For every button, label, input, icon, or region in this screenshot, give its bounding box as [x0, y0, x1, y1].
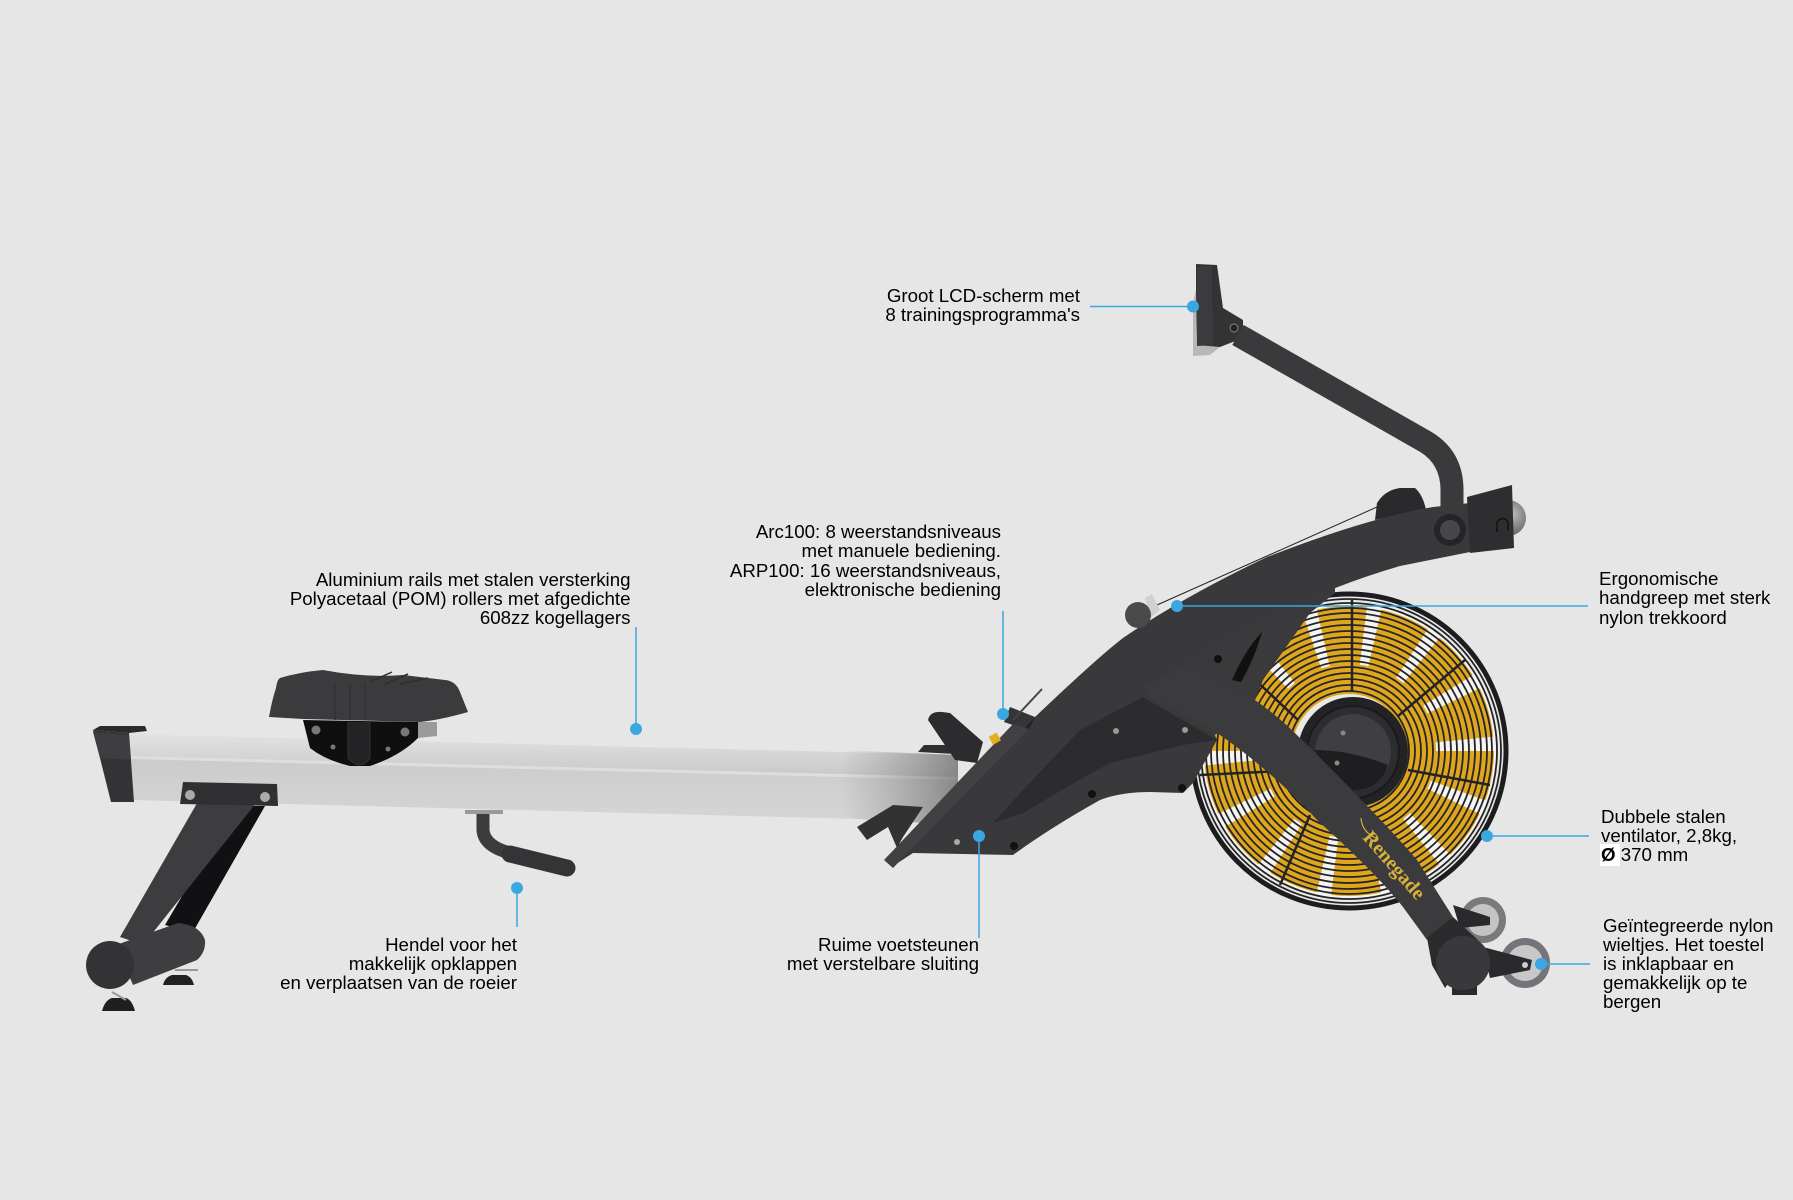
display support arm [1238, 335, 1452, 512]
head box [1434, 485, 1514, 553]
callout: fan: ventilator, 2,8kg, [1601, 825, 1737, 846]
wheels [1427, 897, 1550, 995]
display [1193, 264, 1243, 356]
cord guide behind beam [1375, 488, 1426, 520]
callout: resistance levels [730, 521, 1009, 720]
callout: fan [1481, 806, 1737, 866]
callout: wheels: gemakkelijk op te [1603, 972, 1747, 993]
callout: resistance levels: met manuele bediening. [802, 540, 1001, 561]
callout: resistance levels: elektronische bediening [805, 579, 1001, 600]
callout: ergonomic handle [1171, 568, 1771, 628]
brand logo: Renegade [1358, 827, 1430, 904]
callout: fan: Dubbele stalen [1601, 806, 1726, 827]
handle [1125, 594, 1160, 628]
frame panel [993, 697, 1217, 823]
footplate with straps [857, 689, 1042, 868]
rowing machine illustration [86, 264, 1550, 1011]
callout: resistance levels: Arc100: 8 weerstandsniveaus [756, 521, 1001, 542]
rear dome [1490, 500, 1526, 536]
callout: foot rests [787, 830, 985, 974]
folding handle lever [465, 810, 567, 868]
callout: wheels: wieltjes. Het toestel [1602, 934, 1764, 955]
callout: ergonomic handle: handgreep met sterk [1599, 587, 1771, 608]
callout: ergonomic handle: Ergonomische [1599, 568, 1718, 589]
callout: aluminium rails: Aluminium rails met stalen versterking [316, 569, 630, 590]
callout: folding lever: en verplaatsen van de roeier [280, 972, 517, 993]
callout: ergonomic handle: nylon trekkoord [1599, 607, 1727, 628]
callout: aluminium rails: 608zz kogellagers [480, 607, 630, 628]
fan hub [1298, 697, 1408, 807]
callout: foot rests: Ruime voetsteunen [818, 934, 979, 955]
rail end cap [93, 726, 147, 802]
callout: folding lever: makkelijk opklappen [349, 953, 517, 974]
callout: aluminium rails [290, 569, 642, 735]
callout: fan: Ø 370 mm [1601, 844, 1688, 865]
main frame [893, 503, 1470, 866]
callout: LCD screen [885, 285, 1199, 325]
rail [129, 734, 958, 825]
cord [1157, 507, 1377, 605]
callout: LCD screen: 8 trainingsprogramma's [885, 304, 1080, 325]
callout: wheels: Geïntegreerde nylon [1603, 915, 1773, 936]
arch beam over fan [1143, 665, 1453, 940]
callout: resistance levels: ARP100: 16 weerstandsniveaus, [730, 560, 1001, 581]
callout: aluminium rails: Polyacetaal (POM) rollers met afgedichte [290, 588, 630, 609]
fan [1191, 593, 1507, 909]
seat [269, 670, 468, 766]
callout: LCD screen: Groot LCD-scherm met [887, 285, 1081, 306]
callout: folding lever [280, 882, 523, 993]
callout: wheels: bergen [1603, 991, 1661, 1012]
rear plate behind frame [1180, 585, 1335, 735]
callout: wheels [1535, 915, 1773, 1012]
plate vent [1232, 632, 1262, 682]
rear leg [86, 782, 278, 1011]
callout: folding lever: Hendel voor het [385, 934, 518, 955]
callout: foot rests: met verstelbare sluiting [787, 953, 979, 974]
callout: wheels: is inklapbaar en [1603, 953, 1734, 974]
